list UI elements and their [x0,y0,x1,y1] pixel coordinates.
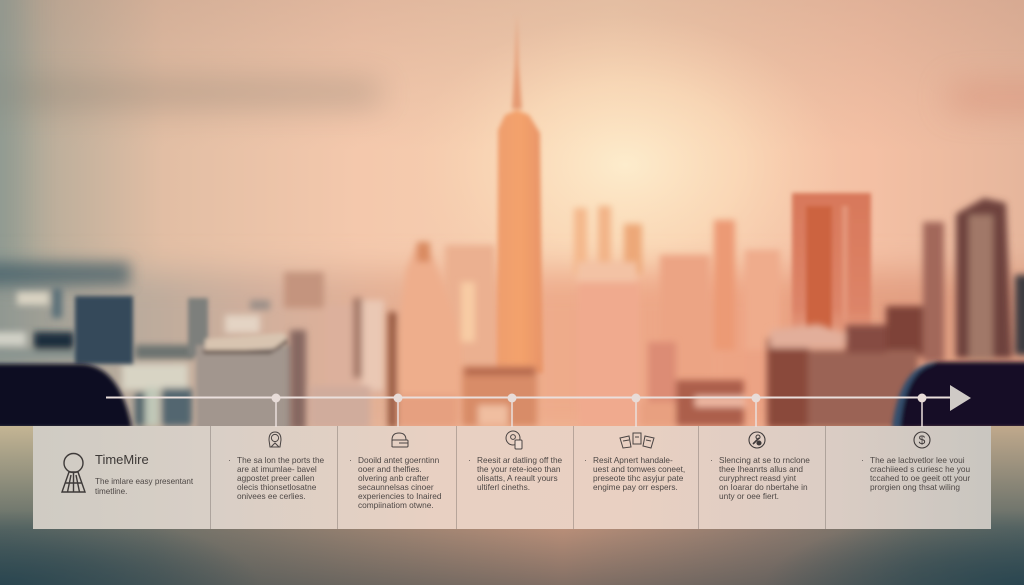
intro text: timetline. [95,486,127,496]
intro text [95,477,193,496]
step 6 text [870,456,970,492]
timeline panel [33,426,991,529]
step 4 icons [619,432,655,449]
step 2 text [358,456,441,509]
step 1 text [237,456,324,501]
step 3 text: ultiferl cineths. [477,482,530,492]
right towers [792,193,871,338]
step 2 text: Dooild antet goerntinn [358,455,439,465]
step 6 text: prorgien ong thsat wiling [870,482,960,492]
step 2 text: experiencies to Inaired [358,491,441,501]
step 6 text: tccahed to oe geeit ott your [870,473,970,483]
step 3 text: olisatts, A reault yours [477,473,558,483]
hazy city mass [0,272,1024,442]
foreground building left [75,296,292,430]
main tower [497,14,543,373]
step 1 text: agpostet preer callen [237,473,314,483]
step 5 text: unty or oee fiert. [719,491,779,501]
mid-ground towers [577,262,745,427]
step 2 text: secaunnelsas cinoer [358,482,434,492]
step 6 icon: $ [919,433,926,447]
step 3 icon [506,430,522,450]
step 4 text: Resit Apnert handale- [593,455,673,465]
step 1 text: olecis thionsetlosatne [237,482,316,492]
intro text: The imlare easy presentant [95,477,193,486]
step 5 text: thee Iheanrts allus and [719,464,803,474]
step 3 text: Reesit ar datling off the [477,455,562,465]
step 1 icon [268,432,282,448]
step 4 text: engime pay orr espers. [593,482,678,492]
step 4 text: preseote tihc asyjur pate [593,473,683,483]
step 3 text: the your rete-ioeo than [477,464,560,474]
step 5 text [719,456,810,501]
step 5 text: curyphrect reasd yint [719,473,796,483]
foreground dark shapes [0,362,1024,428]
step 6 text: crachiieed s curiesc he you [870,464,970,474]
step 1 text: are at imumlae- bavel [237,464,317,474]
step 4 text [593,456,685,492]
step 2 text: olvering anb crafter [358,473,429,483]
step 3 text [477,456,562,492]
timeline with nodes and arrow [106,385,971,427]
step 5 text: Slencing at se to rnclone [719,455,810,465]
step 4 text: uest and tomwes coneet, [593,464,685,474]
step 6 icon [913,432,930,448]
distant towers [0,206,780,426]
step 1 text: The sa lon the ports the [237,455,324,465]
step 1 text: onivees ee cerlies. [237,491,306,501]
step 5 icon [748,432,766,448]
step 6 text: The ae lacbvetlor lee voui [870,455,965,465]
step 2 text: compiinatiom otwne. [358,500,434,510]
step 2 text: ooer and thelfies. [358,464,422,474]
intro title: TimeMire [95,452,149,467]
intro icon: figure [61,452,86,493]
step 5 text: on Ioarar do nbertahe in [719,482,808,492]
step 2 icon [392,432,408,448]
